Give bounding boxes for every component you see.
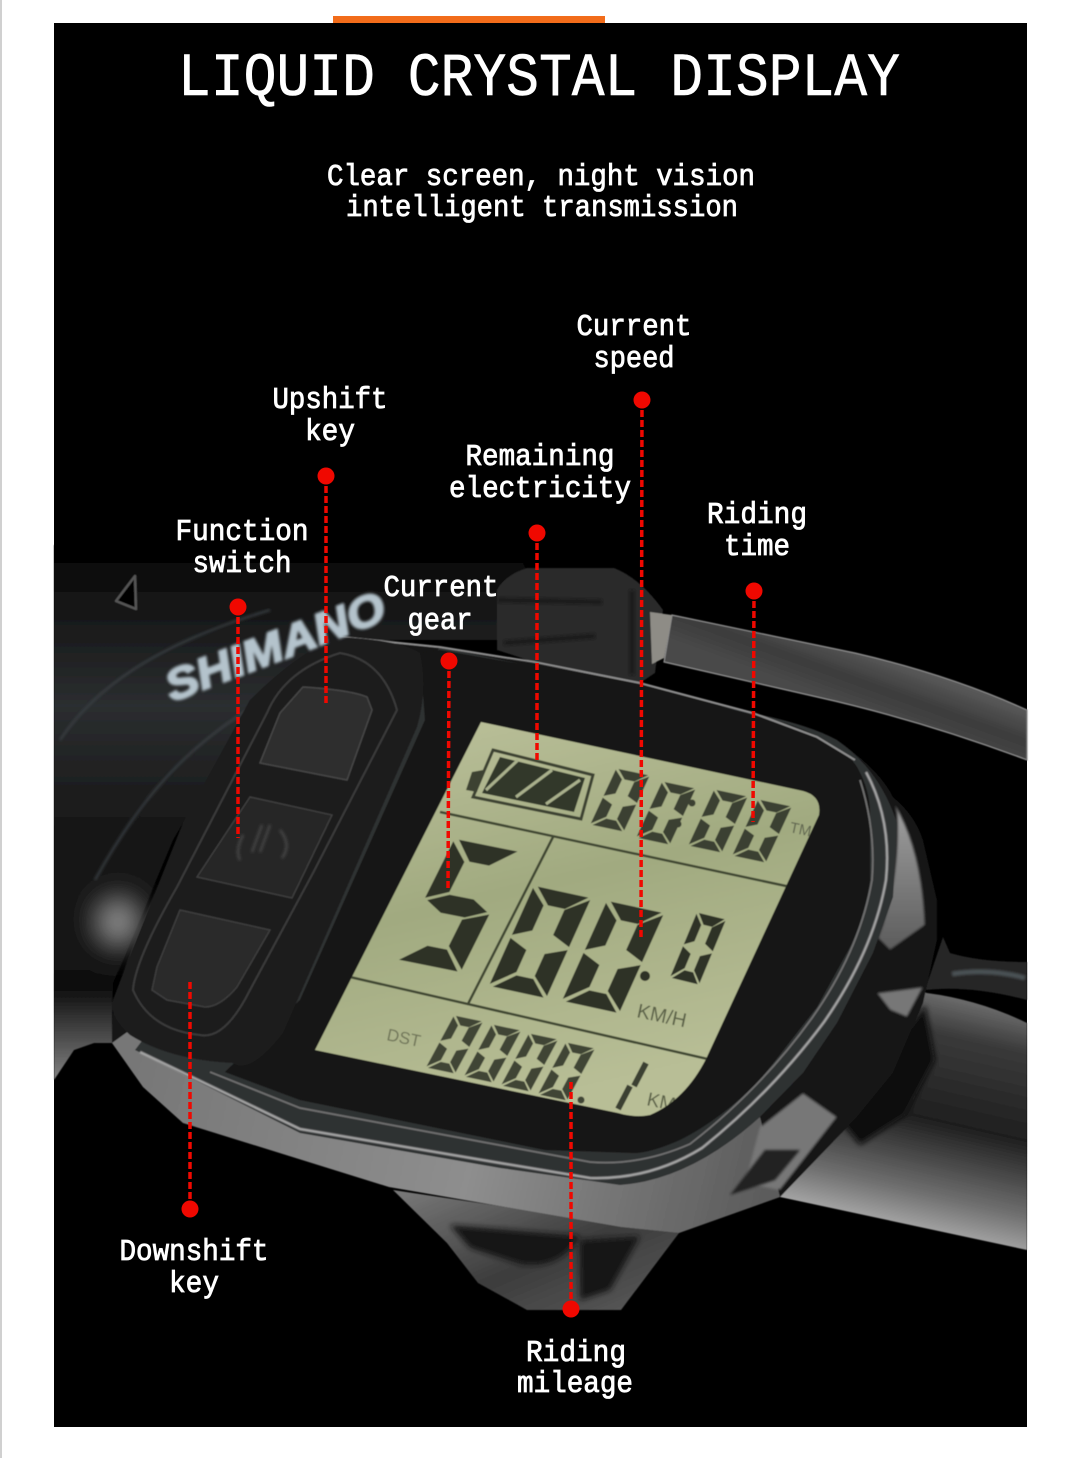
callout: downshift key (120, 982, 268, 1302)
LCD unit labels (385, 819, 813, 1116)
callout: remaining electricity (449, 440, 631, 762)
callout: riding time (707, 498, 807, 822)
photo: handle edge lit patch (54, 990, 112, 1080)
photo: handlebar grip (780, 985, 1027, 1250)
callout: upshift key (272, 383, 388, 705)
callout: remaining electricity: electricity (449, 472, 631, 507)
photo: reflection wedge (730, 1150, 800, 1195)
callout: riding time: time (724, 530, 790, 565)
subtitle (327, 160, 755, 226)
photo: mount under the display (393, 1190, 679, 1310)
icon: function button (197, 797, 332, 898)
photo: ring inner highlight (210, 780, 873, 1163)
photo: left button panel (112, 637, 423, 1066)
photo: lower casing band (112, 1030, 780, 1233)
LCD time segments (590, 768, 792, 863)
title: LIQUID CRYSTAL DISPLAY (178, 45, 900, 114)
callout: function switch: Function (176, 515, 308, 550)
photo: ring outer highlight (140, 772, 887, 1178)
battery indicator (466, 750, 593, 819)
photo: cable connector knob (497, 568, 663, 683)
photo: knob ribs (497, 590, 632, 675)
callout: current speed: Current (576, 310, 692, 345)
photo: right cable (664, 615, 1027, 760)
photo: casing lower reflection (745, 1093, 837, 1190)
callout: downshift key: key (169, 1267, 219, 1302)
photo: housing contour (60, 610, 270, 880)
callout: function switch: switch (192, 547, 292, 582)
subtitle: Clear screen, night vision (327, 160, 755, 195)
photo: grip shadow near casing (840, 1005, 935, 1145)
page left edge (0, 0, 2, 1458)
photo: casing ring (135, 647, 897, 1185)
callout: upshift key: key (305, 415, 355, 450)
LCD divider lines (350, 812, 800, 1060)
photo: casing reflection (877, 987, 923, 1017)
callout: riding mileage: Riding (526, 1336, 626, 1371)
icon: upshift button (260, 687, 372, 780)
SHIMANO brand logo: SHIMANO (158, 582, 392, 711)
photo: handlebar display assembly (54, 545, 1027, 1310)
photo: metal connector (650, 612, 672, 664)
LCD speed segments (489, 886, 726, 1013)
photo: grip highlight blob (94, 896, 142, 948)
callout: current gear (384, 571, 498, 890)
callout: current gear: gear (408, 604, 472, 639)
LCD unit labels: DST (385, 1025, 422, 1051)
callout: upshift key: Upshift (272, 383, 388, 418)
callout: current gear: Current (384, 571, 498, 606)
callout: function switch (176, 515, 308, 838)
LCD unit labels: KM (645, 1089, 677, 1116)
LCD mileage segments (426, 1015, 646, 1109)
LCD unit labels: KM/H (635, 1000, 688, 1032)
callout: remaining electricity: Remaining (466, 440, 614, 475)
photo: display casing (112, 637, 937, 1233)
LCD gear segments (394, 839, 520, 972)
icon: housing triangle (116, 576, 136, 609)
photo: black bezel (225, 650, 870, 1153)
callout: riding mileage: mileage (517, 1367, 633, 1402)
icon: downshift button (152, 910, 270, 1007)
photo: cable highlight (952, 972, 1025, 978)
photo: button panel inner border (133, 653, 397, 1035)
callout: riding time: Riding (707, 498, 807, 533)
subtitle: intelligent transmission (346, 191, 738, 226)
photo: casing right light patch (878, 805, 925, 950)
photo: lower small cable (925, 937, 1027, 1000)
LCD unit labels: TM (788, 819, 813, 840)
callout: current speed: speed (594, 342, 674, 377)
photo: mount shadow (450, 1225, 640, 1300)
callout: current speed (576, 310, 692, 938)
photo: shifter housing (54, 545, 530, 1080)
orange top bar (333, 16, 605, 23)
callout: riding mileage (517, 1080, 633, 1402)
callout: downshift key: Downshift (120, 1235, 268, 1270)
LCD background (315, 722, 819, 1116)
photo: bezel top highlight (340, 637, 855, 760)
LCD screen (315, 722, 819, 1116)
